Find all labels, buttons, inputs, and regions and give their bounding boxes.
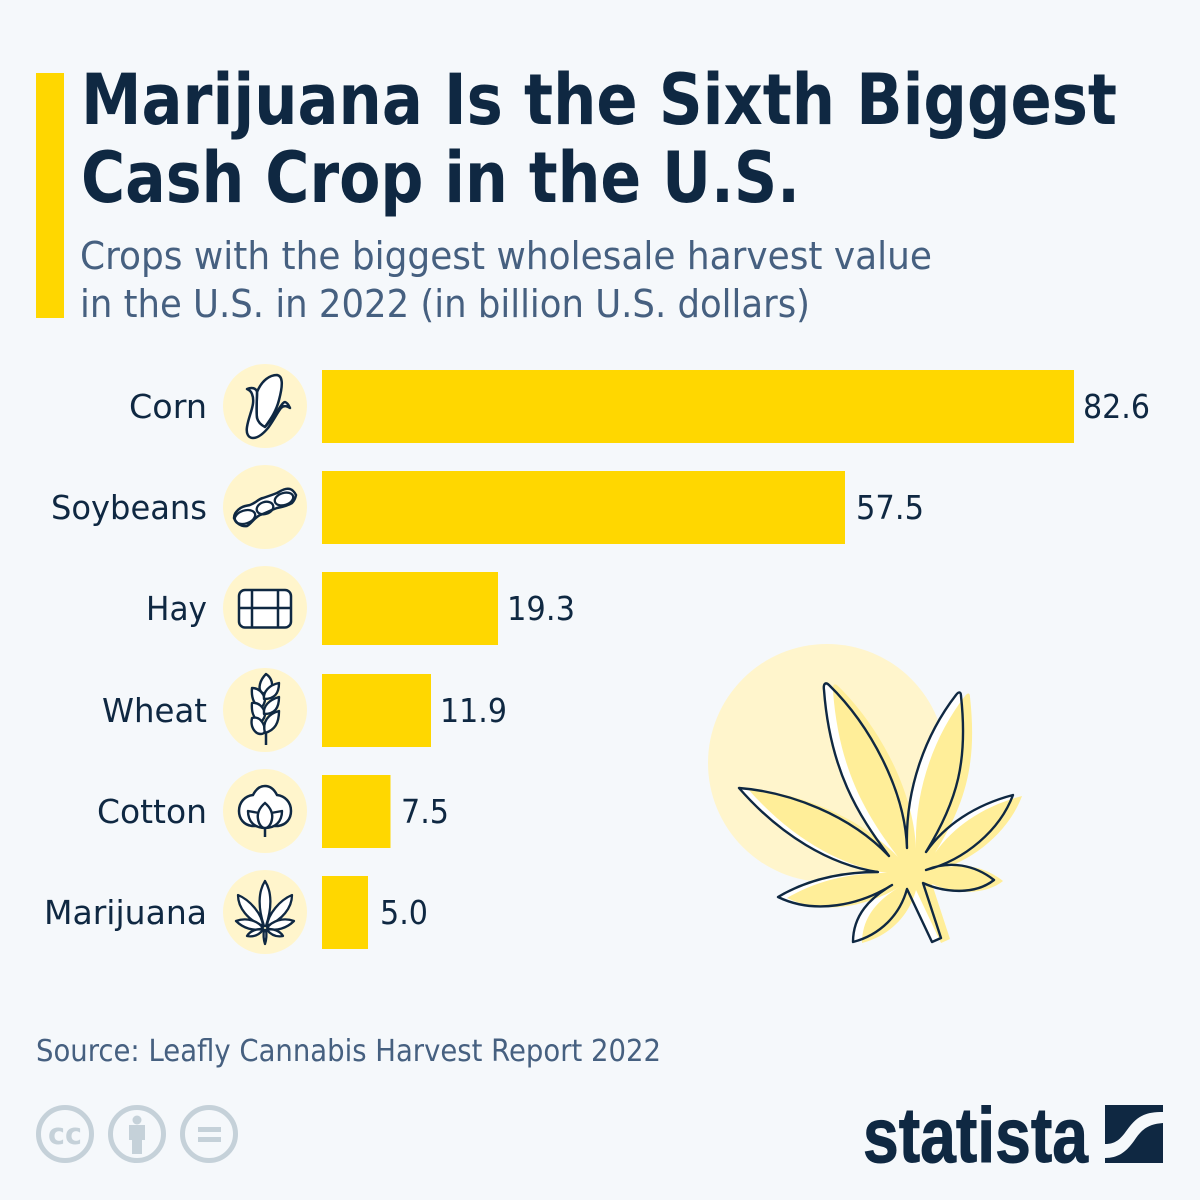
row: Wheat bbox=[102, 668, 307, 752]
licence icons bbox=[38, 1108, 236, 1160]
icon: attribution bbox=[110, 1108, 164, 1160]
bar: Soybeans bbox=[322, 471, 845, 544]
row: Corn: Corn bbox=[129, 387, 207, 426]
icon: cc: cc bbox=[48, 1117, 82, 1151]
value: Wheat: 11.9 bbox=[440, 691, 507, 730]
row: Wheat: Wheat bbox=[102, 691, 207, 730]
row: Marijuana: Marijuana bbox=[44, 893, 207, 932]
subtitle: in the U.S. in 2022 (in billion U.S. dollars) bbox=[80, 282, 810, 326]
statista logo: statista bbox=[863, 1091, 1089, 1179]
bar chart bbox=[44, 364, 1150, 954]
subtitle: Crops with the biggest wholesale harvest value bbox=[80, 234, 932, 278]
row: Cotton bbox=[97, 769, 307, 853]
row: Soybeans bbox=[51, 465, 307, 549]
icon: statista mark bbox=[1105, 1105, 1163, 1163]
value: Hay: 19.3 bbox=[507, 589, 575, 628]
title accent bar bbox=[36, 73, 64, 318]
icon: cc bbox=[38, 1108, 92, 1160]
icon: no derivatives bbox=[182, 1108, 236, 1160]
bar: Marijuana bbox=[322, 876, 368, 949]
value: Corn: 82.6 bbox=[1083, 387, 1150, 426]
value: Soybeans: 57.5 bbox=[856, 488, 924, 527]
row: Soybeans: Soybeans bbox=[51, 488, 207, 527]
bar: Corn bbox=[322, 370, 1074, 443]
illustration: cannabis leaf bbox=[708, 644, 1022, 943]
bar: Hay bbox=[322, 572, 498, 645]
bar: Wheat bbox=[322, 674, 431, 747]
value: Marijuana: 5.0 bbox=[380, 893, 428, 932]
row: Hay bbox=[146, 566, 307, 650]
row: Cotton: Cotton bbox=[97, 792, 207, 831]
row: Corn bbox=[129, 364, 307, 448]
subtitle bbox=[80, 234, 932, 326]
value: Cotton: 7.5 bbox=[401, 792, 449, 831]
source: Source: Leafly Cannabis Harvest Report 2022 bbox=[36, 1034, 661, 1069]
row: Marijuana bbox=[44, 870, 307, 954]
row: Hay: Hay bbox=[146, 589, 207, 628]
title bbox=[81, 59, 1117, 219]
title: Cash Crop in the U.S. bbox=[81, 137, 800, 219]
bar: Cotton bbox=[322, 775, 390, 848]
